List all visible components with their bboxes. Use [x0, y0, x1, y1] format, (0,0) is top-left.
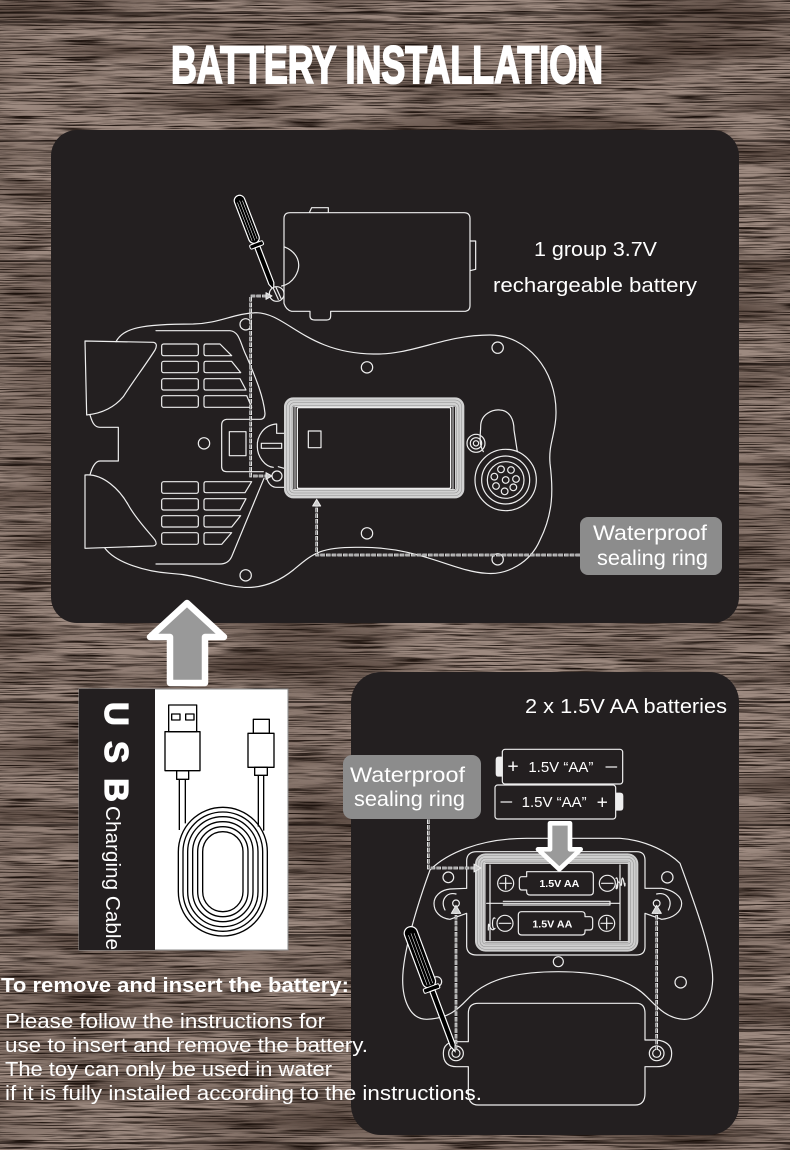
rechargeable battery label: rechargeable battery: [493, 275, 697, 297]
front wheels and bumper: [85, 341, 156, 548]
arrow: left screw guide: [451, 905, 461, 1050]
toy body outline: [105, 313, 556, 587]
callout: waterproof sealing ring: sealing ring: [354, 788, 465, 811]
callout: waterproof sealing ring: [343, 755, 481, 819]
icon: USB cable: [165, 705, 274, 936]
hood lines: [156, 331, 265, 564]
toy body outline: [403, 838, 713, 1019]
text block: remove and insert the battery instructions: if it is fully installed according to the instructions.: [5, 1083, 482, 1105]
panel: AA battery installation: [343, 672, 739, 1135]
rechargeable battery pack: [282, 208, 476, 320]
AA battery bottom: +: [597, 792, 608, 813]
USB-C plug: [248, 719, 274, 831]
screw holes: [198, 319, 503, 581]
AA batteries heading: 2 x 1.5V AA batteries: [525, 696, 727, 718]
AA battery bottom: [495, 785, 623, 819]
arrow: sealing ring guide: [313, 499, 580, 555]
rechargeable battery label: [493, 239, 697, 297]
arrow: insert batteries: [538, 823, 581, 869]
diagram: toy underside with AA batteries: [401, 749, 713, 1105]
text block: remove and insert the battery instructions: To remove and insert the battery:: [1, 975, 349, 997]
speaker and port: [467, 410, 536, 511]
AA battery top: 1.5V “AA”: [528, 759, 593, 776]
battery cover: [443, 1003, 672, 1105]
arrow: sealing ring guide: [428, 819, 481, 872]
USB label: [98, 702, 135, 950]
diagram: toy underside with rechargeable battery: [85, 193, 580, 587]
callout: waterproof sealing ring: Waterproof: [593, 522, 707, 545]
AA battery top: [496, 749, 623, 784]
battery bay and ears: [434, 852, 682, 955]
vents: [162, 344, 252, 544]
battery pack screw: [269, 287, 284, 301]
sealing ring: [477, 856, 636, 949]
diagram: toy underside with AA batteries: 1.5V AA: [532, 919, 573, 930]
text block: remove and insert the battery instructions: The toy can only be used in water: [5, 1059, 332, 1081]
arrow: right screw guide: [652, 905, 661, 1050]
USB label: USB: [98, 702, 135, 802]
arrow: screw guide: [251, 293, 272, 479]
battery compartment with sealing ring: [287, 400, 462, 496]
USB-A plug: [165, 705, 200, 830]
AA cell labels: 1.5V AA: [539, 879, 580, 890]
arrow: USB up to toy: [150, 603, 224, 683]
AA battery top: +: [507, 757, 519, 778]
coiled cable: [178, 807, 267, 936]
screwdriver: [231, 193, 280, 292]
callout: waterproof sealing ring: Waterproof: [350, 764, 465, 787]
text block: remove and insert the battery instructions: Please follow the instructions for: [5, 1011, 325, 1033]
AA battery bottom: 1.5V “AA”: [522, 794, 587, 811]
USB label: Charging Cable: [101, 806, 123, 950]
screwdriver: [401, 924, 463, 1054]
text block: remove and insert the battery instructions: [1, 975, 482, 1105]
callout: waterproof sealing ring: sealing ring: [597, 547, 708, 570]
battery holder detail: [487, 865, 625, 940]
panel: USB charging cable: [79, 689, 288, 950]
bottom screws: [449, 1046, 664, 1061]
callout: waterproof sealing ring: [580, 517, 722, 575]
rechargeable battery label: 1 group 3.7V: [534, 239, 658, 261]
panel: rechargeable battery installation: [51, 130, 739, 623]
text block: remove and insert the battery instructions: use to insert and remove the battery.: [5, 1035, 368, 1057]
